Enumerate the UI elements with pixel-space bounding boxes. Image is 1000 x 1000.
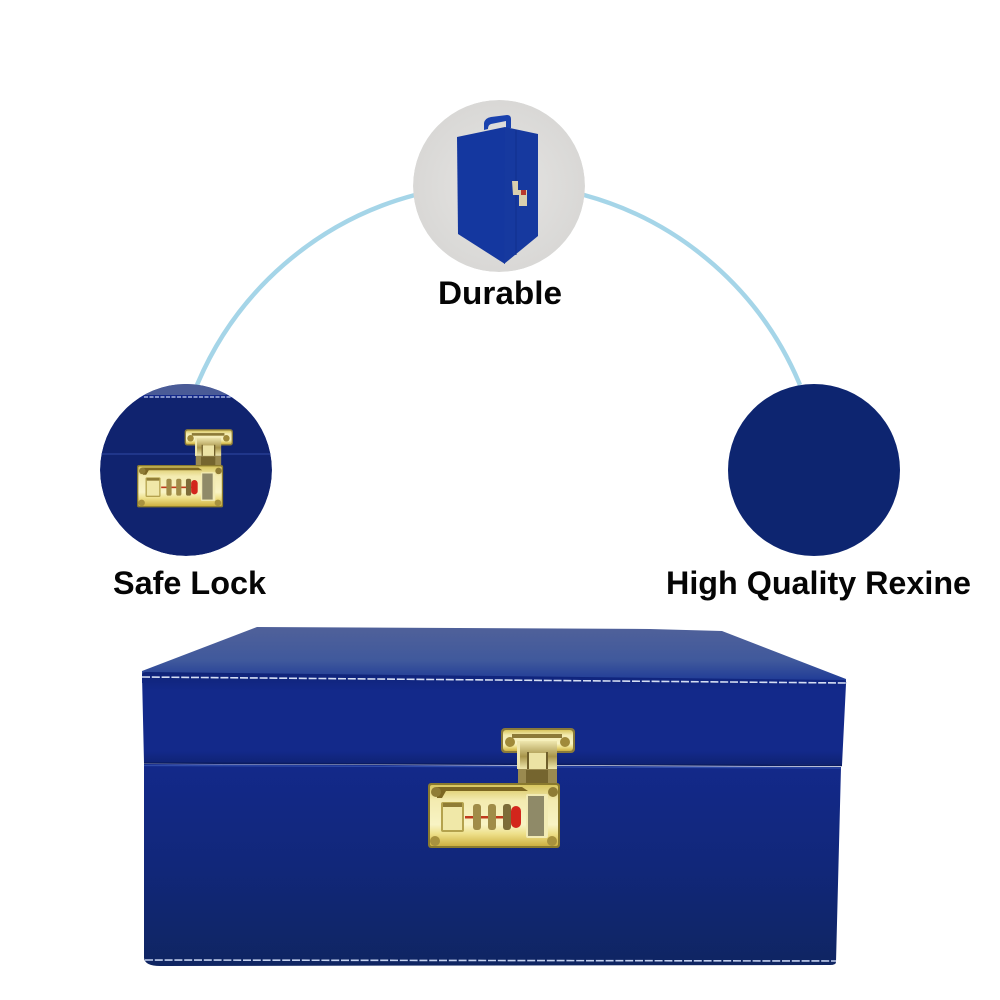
label: Durable: Durable xyxy=(438,275,562,311)
lid stitching xyxy=(142,677,846,683)
feature: safe lock xyxy=(100,384,272,601)
feature: high quality rexine xyxy=(666,384,971,601)
box lid front xyxy=(142,672,846,765)
label: Safe Lock: Safe Lock xyxy=(113,565,266,601)
product photo: blue box xyxy=(142,627,846,966)
photo: lock close-up xyxy=(100,384,272,556)
feature: durable xyxy=(413,100,585,311)
swatch: rexine texture xyxy=(728,384,900,556)
base stitching xyxy=(145,960,836,961)
label: High Quality Rexine: High Quality Rexine xyxy=(666,565,971,601)
photo: upright blue case xyxy=(413,100,585,272)
box top face xyxy=(142,627,846,683)
brass combination lock xyxy=(428,728,575,848)
connecting arc xyxy=(197,195,800,385)
box base front xyxy=(144,764,841,966)
